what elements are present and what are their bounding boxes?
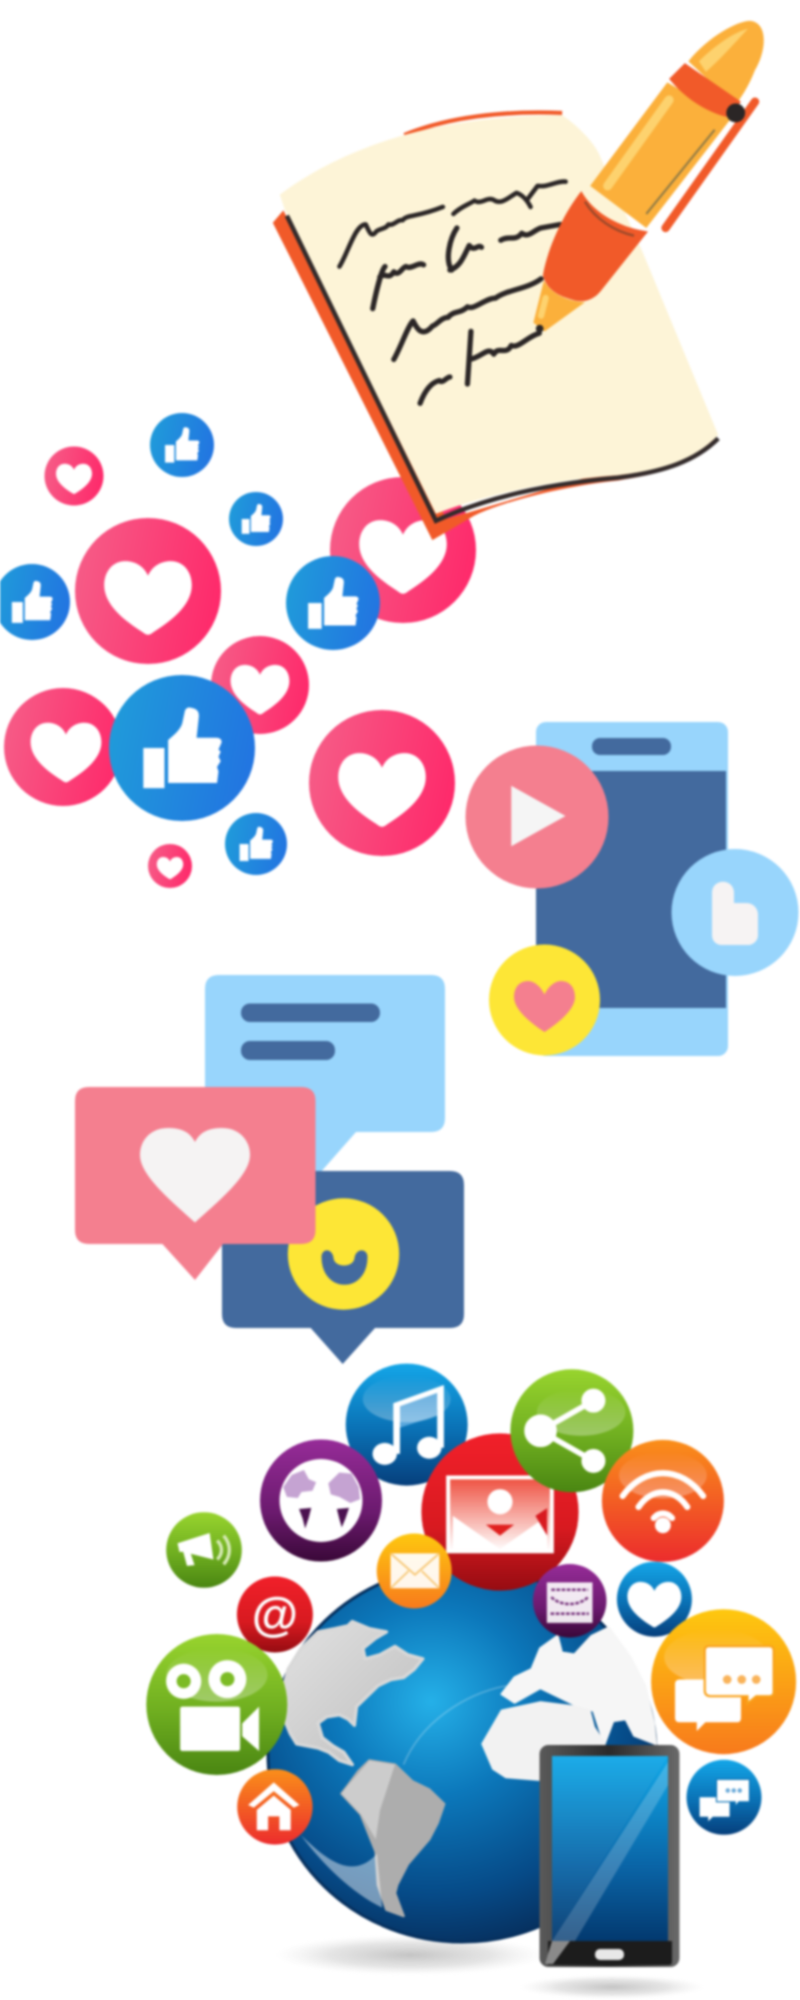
illustration: phone with reactions bbox=[466, 722, 798, 1056]
icon: at sign: @ bbox=[252, 1588, 298, 1641]
icon: share bbox=[510, 1369, 633, 1492]
north america bbox=[282, 1622, 423, 1765]
icon: play button bbox=[466, 746, 608, 888]
icon: thumb bubble far left bbox=[0, 564, 70, 640]
icon: yellow heart bubble bbox=[489, 944, 600, 1056]
icon: picture bbox=[421, 1433, 579, 1591]
icon: heart bubble lower left bbox=[4, 688, 122, 806]
continents bbox=[282, 1622, 656, 1916]
icon: music bbox=[346, 1364, 468, 1486]
pink heart bubble bbox=[75, 1087, 316, 1280]
icon: large thumb bubble bbox=[109, 675, 255, 821]
icon: heart bubble behind notebook bbox=[330, 477, 476, 623]
icon: heart bbox=[617, 1562, 692, 1637]
notebook cover bbox=[273, 210, 718, 540]
icon: chat large bbox=[651, 1609, 796, 1754]
globe bbox=[266, 1564, 658, 1944]
globe sheen bbox=[301, 1835, 382, 1908]
icon: small heart bubble bbox=[44, 446, 104, 506]
icon: world bbox=[260, 1440, 382, 1562]
icon: thumb bubble middle bbox=[286, 556, 380, 650]
icon: thumb bubble top bbox=[150, 413, 214, 477]
icon: envelope bbox=[377, 1534, 452, 1608]
illustration: globe with media icons bbox=[146, 1364, 796, 1999]
notebook top edge bbox=[404, 112, 562, 135]
handwriting bbox=[339, 182, 566, 403]
phone screen bbox=[536, 771, 726, 1008]
light blue message bubble bbox=[205, 975, 445, 1190]
africa bbox=[483, 1702, 604, 1781]
eurasia bbox=[502, 1628, 656, 1744]
icon: large heart bubble right bbox=[309, 710, 455, 856]
icon: heart bubble center bbox=[211, 636, 309, 734]
illustration: notebook and pen bbox=[273, 21, 764, 540]
icon: keyboard bbox=[533, 1564, 606, 1638]
pen band bbox=[669, 63, 741, 117]
tablet device bbox=[540, 1745, 680, 1967]
icon: thumb bubble bottom bbox=[225, 813, 287, 875]
icon: wifi bbox=[602, 1440, 724, 1562]
phone body bbox=[536, 722, 728, 1056]
pen grip bbox=[543, 191, 648, 301]
icon: chat small bbox=[686, 1760, 762, 1835]
icon: home bbox=[237, 1769, 313, 1845]
icon: small thumb bubble bbox=[229, 492, 283, 546]
pen barrel bbox=[590, 82, 730, 228]
illustration: chat bubbles bbox=[75, 975, 464, 1364]
icon: large heart bubble left bbox=[75, 518, 221, 664]
icon: at sign bbox=[237, 1576, 313, 1652]
pen nib bbox=[533, 281, 585, 331]
phone shadow bbox=[520, 1975, 704, 1999]
pen cap bbox=[688, 21, 764, 105]
phone speaker bbox=[592, 738, 671, 755]
icon: film camera bbox=[146, 1634, 287, 1775]
icon: like bubble bbox=[672, 849, 798, 976]
dark blue emoji bubble bbox=[222, 1171, 464, 1364]
pen clip bbox=[666, 102, 755, 228]
notebook page bbox=[280, 115, 718, 514]
icon: tiny heart bubble bbox=[148, 844, 192, 888]
south america bbox=[342, 1760, 444, 1916]
pen barrel highlight bbox=[608, 100, 669, 186]
globe shadow bbox=[275, 1935, 545, 1975]
notebook spine line bbox=[287, 216, 718, 521]
group: likes and hearts bubbles bbox=[0, 413, 476, 888]
icon: megaphone bbox=[166, 1512, 242, 1588]
